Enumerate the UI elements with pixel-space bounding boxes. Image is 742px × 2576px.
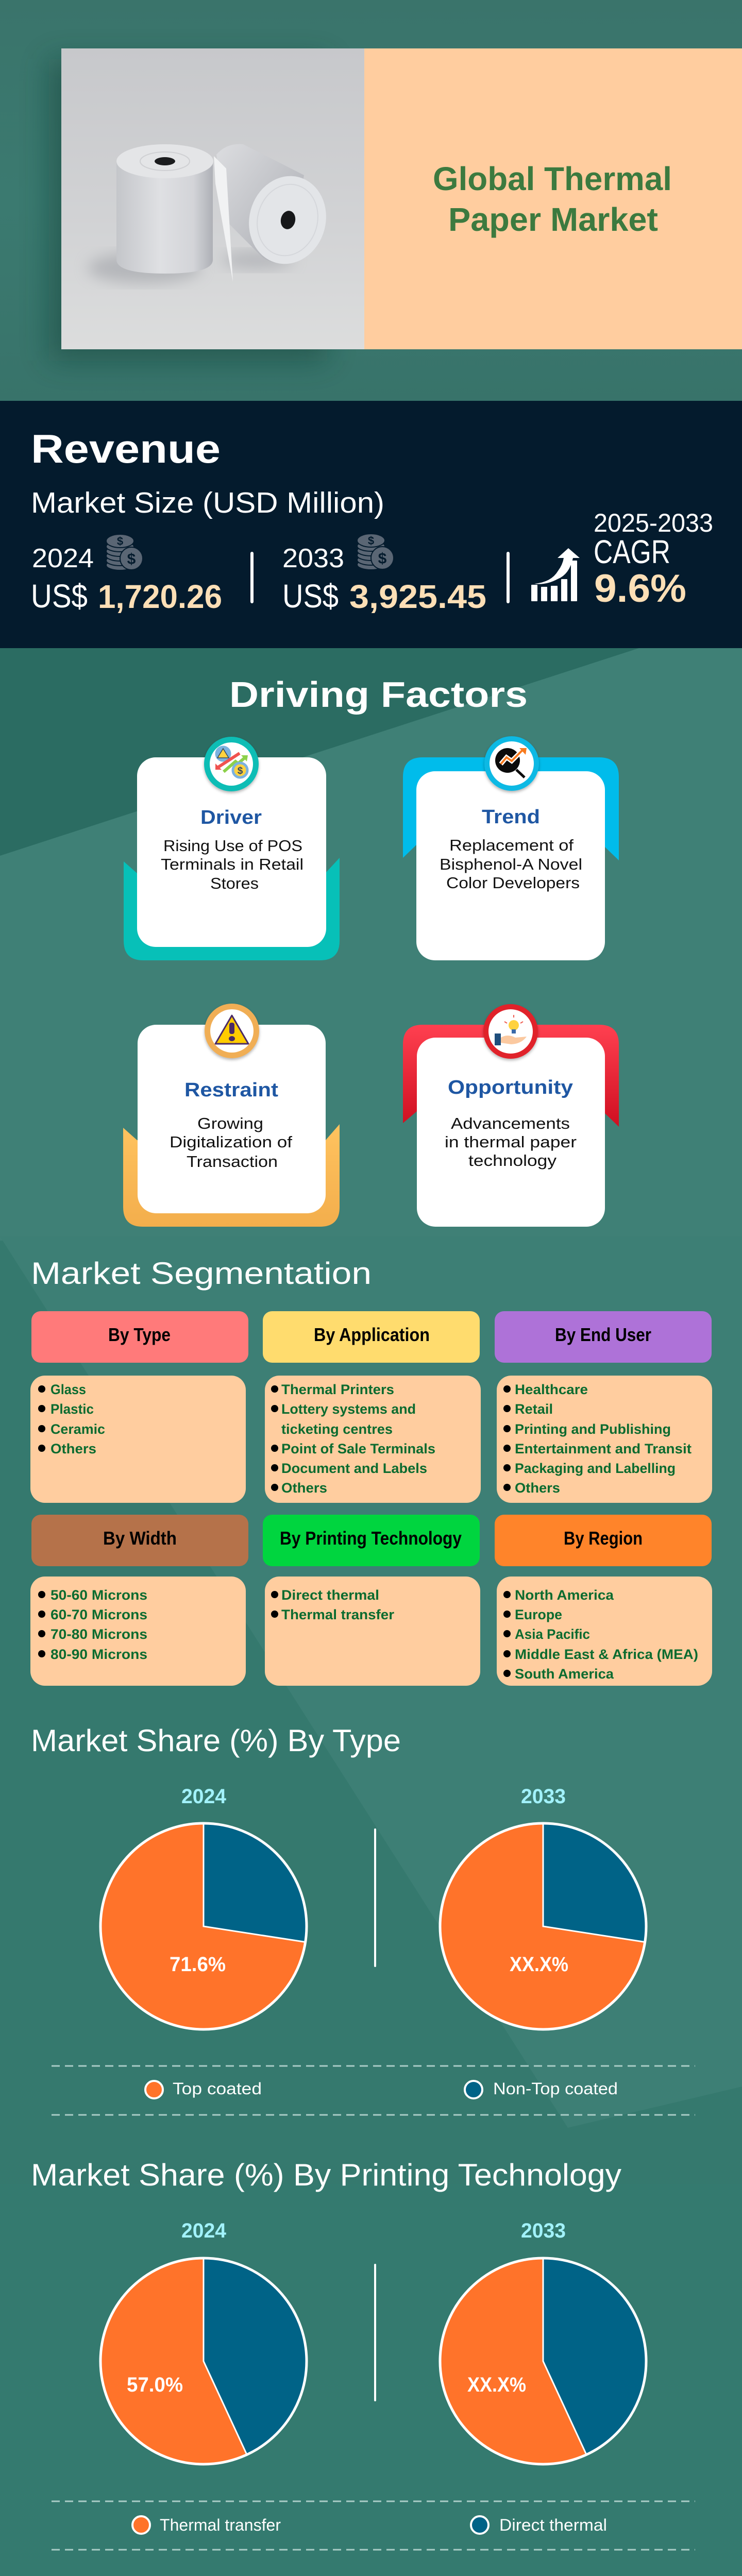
panel: by type: By Type bbox=[108, 1324, 171, 1345]
stat: cagr: 9.6% bbox=[594, 567, 686, 611]
text: driver description: Terminals in Retail bbox=[161, 855, 303, 873]
text: opportunity description: in thermal paper bbox=[445, 1133, 577, 1151]
stat: cagr bbox=[594, 509, 713, 611]
legend: type bbox=[145, 2079, 618, 2098]
icon: coin stack 2024: $ bbox=[117, 535, 123, 548]
photo shadow bbox=[49, 59, 327, 361]
panel: by printing technology: Thermal transfer bbox=[281, 1607, 395, 1622]
text: opportunity description: technology bbox=[468, 1151, 557, 1170]
panel: by end user: Packaging and Labelling bbox=[515, 1461, 676, 1476]
panel: by end user: Printing and Publishing bbox=[515, 1421, 671, 1437]
panel: trend card bbox=[403, 736, 619, 960]
panel: by type: Others bbox=[50, 1441, 96, 1456]
text: opportunity description bbox=[445, 1114, 577, 1170]
panel: by region: Middle East & Africa (MEA) bbox=[515, 1647, 698, 1662]
stat: 2024 revenue: 1,720.26 bbox=[98, 578, 222, 615]
panel: by end user: By End User bbox=[555, 1324, 651, 1345]
text: restraint description: Transaction bbox=[187, 1153, 278, 1171]
panel: by end user: Healthcare bbox=[515, 1382, 588, 1397]
title: Paper Market bbox=[448, 201, 658, 238]
panel: by region: Asia Pacific bbox=[515, 1626, 590, 1642]
text: trend description: Bisphenol-A Novel bbox=[440, 855, 582, 873]
panel: by printing technology bbox=[263, 1515, 480, 1686]
stat: 2033 revenue: 2033 bbox=[282, 544, 344, 573]
text: driver description: Rising Use of POS bbox=[163, 837, 302, 855]
legend: printing technology bbox=[132, 2516, 607, 2534]
heading: trend: Trend bbox=[482, 806, 540, 828]
text: trend description: Color Developers bbox=[446, 874, 580, 892]
panel: by application bbox=[263, 1311, 481, 1503]
chart: printing pie 2024 bbox=[100, 2219, 307, 2464]
stat: 2033 revenue: US$ bbox=[282, 578, 339, 615]
legend: printing technology: Thermal transfer bbox=[160, 2516, 281, 2534]
heading: restraint: Restraint bbox=[184, 1079, 278, 1101]
panel: by application: Thermal Printers bbox=[281, 1382, 394, 1397]
panel: by region: Europe bbox=[515, 1607, 562, 1622]
heading: market share by printing technology: Market Share (%) By Printing Technology bbox=[31, 2158, 621, 2192]
panel: driver card bbox=[124, 737, 340, 960]
text: trend description: Replacement of bbox=[449, 836, 574, 854]
text: trend description bbox=[440, 836, 582, 892]
text: driver description bbox=[161, 837, 303, 892]
stat: 2033 revenue bbox=[282, 544, 486, 615]
panel: by region bbox=[495, 1515, 712, 1686]
legend: type: Top coated bbox=[173, 2079, 262, 2098]
panel: by application: Document and Labels bbox=[281, 1461, 427, 1476]
heading: driving factors: Driving Factors bbox=[229, 674, 528, 715]
panel: by end user: Others bbox=[515, 1480, 560, 1496]
panel: by end user bbox=[495, 1311, 712, 1503]
icon: coin stack 2033 bbox=[357, 534, 394, 570]
heading: opportunity: Opportunity bbox=[448, 1077, 573, 1098]
icon: hand holding light bulb bbox=[495, 1015, 527, 1045]
panel: opportunity card bbox=[403, 1004, 619, 1227]
panel: by printing technology: Direct thermal bbox=[281, 1587, 379, 1603]
panel: by width: 80-90 Microns bbox=[50, 1647, 147, 1662]
stat: 2024 revenue bbox=[31, 544, 222, 615]
panel: by region: North America bbox=[515, 1587, 614, 1603]
heading: market segmentation: Market Segmentation bbox=[31, 1256, 372, 1291]
stat: 2024 revenue: 2024 bbox=[32, 544, 94, 573]
panel: by application: By Application bbox=[314, 1324, 430, 1345]
icon: warning triangle bbox=[215, 1015, 248, 1044]
panel: by width: 70-80 Microns bbox=[50, 1626, 147, 1642]
panel: by width bbox=[30, 1515, 248, 1686]
heading: market share by type: Market Share (%) By Type bbox=[31, 1723, 401, 1758]
icon: coin stack 2033: $ bbox=[368, 534, 374, 547]
heading: driver: Driver bbox=[200, 807, 262, 828]
panel: by end user: Entertainment and Transit bbox=[515, 1441, 692, 1456]
icon: magnifier with trend line bbox=[495, 748, 527, 777]
text: opportunity description: Advancements bbox=[451, 1114, 570, 1132]
panel: hero photo of thermal paper rolls bbox=[61, 48, 364, 349]
chart: type pie 2033 bbox=[440, 1785, 646, 2029]
panel: by region: By Region bbox=[564, 1528, 643, 1549]
stat: 2024 revenue: US$ bbox=[31, 578, 88, 615]
stat: cagr: 2025-2033 bbox=[594, 509, 713, 537]
icon: driver gears and arrows bbox=[215, 747, 248, 777]
panel: by application: ticketing centres bbox=[281, 1421, 393, 1437]
panel: by application: Lottery systems and bbox=[281, 1401, 416, 1417]
panel: by type bbox=[30, 1311, 248, 1503]
panel: by printing technology: By Printing Technology bbox=[280, 1528, 462, 1549]
stat: cagr: CAGR bbox=[594, 533, 670, 570]
panel: title block bbox=[364, 48, 742, 349]
legend: printing technology: Direct thermal bbox=[499, 2516, 607, 2534]
panel: by application: Point of Sale Terminals bbox=[281, 1441, 435, 1456]
chart: type pie 2024: 71.6% bbox=[170, 1953, 226, 1976]
stat: 2033 revenue: 3,925.45 bbox=[349, 578, 486, 615]
chart: printing pie 2033: 2033 bbox=[521, 2219, 566, 2242]
panel: by type: Ceramic bbox=[50, 1421, 105, 1437]
panel: by region: South America bbox=[515, 1666, 614, 1682]
icon: growth chart arrow bbox=[531, 548, 580, 601]
panel: restraint card bbox=[123, 1004, 340, 1227]
panel: by width: 50-60 Microns bbox=[50, 1587, 147, 1603]
chart: type pie 2024 bbox=[100, 1785, 307, 2029]
chart: printing pie 2033 bbox=[440, 2219, 646, 2464]
text: restraint description: Growing bbox=[197, 1114, 263, 1132]
panel: by type: Plastic bbox=[50, 1401, 94, 1417]
heading: revenue: Revenue bbox=[31, 426, 221, 471]
panel: by width: 60-70 Microns bbox=[50, 1607, 147, 1622]
icon: coin stack 2024 bbox=[106, 534, 143, 570]
text: driver description: Stores bbox=[210, 874, 259, 892]
title bbox=[433, 160, 672, 238]
icon: coin stack 2033: $ bbox=[378, 550, 387, 567]
icon: coin stack 2024: $ bbox=[127, 551, 136, 568]
text: market size: Market Size (USD Million) bbox=[31, 486, 384, 519]
chart: printing pie 2024: 2024 bbox=[181, 2219, 227, 2242]
panel: by application: Others bbox=[281, 1480, 327, 1496]
panel: by end user: Retail bbox=[515, 1401, 553, 1417]
text: restraint description: Digitalization of bbox=[170, 1133, 292, 1151]
chart: type pie 2024: 2024 bbox=[181, 1785, 227, 1808]
icon: driver gears and arrows: $ bbox=[238, 766, 243, 776]
chart: type pie 2033: 2033 bbox=[521, 1785, 566, 1808]
panel: by type: Glass bbox=[50, 1382, 86, 1397]
chart: type pie 2033: XX.X% bbox=[510, 1953, 568, 1976]
text: restraint description bbox=[170, 1114, 292, 1171]
legend: type: Non-Top coated bbox=[493, 2079, 618, 2098]
panel: by width: By Width bbox=[103, 1528, 177, 1549]
title: Global Thermal bbox=[433, 160, 672, 197]
panel: revenue band bbox=[0, 401, 742, 648]
chart: printing pie 2033: XX.X% bbox=[467, 2374, 526, 2396]
chart: printing pie 2024: 57.0% bbox=[127, 2374, 183, 2396]
